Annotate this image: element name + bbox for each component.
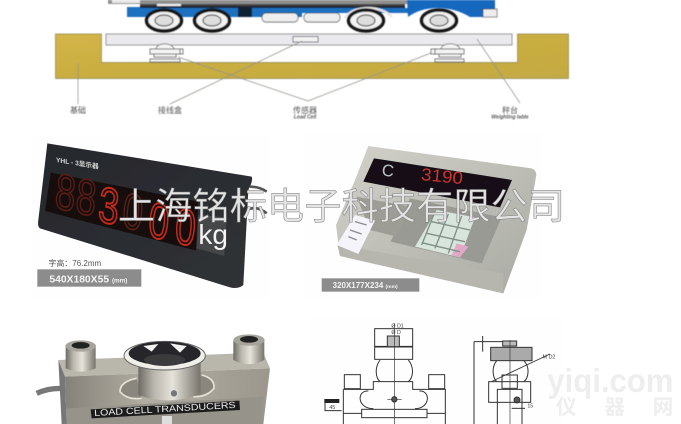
- label: load cell: Load Cell: [294, 114, 317, 120]
- LED digits: 8: [53, 163, 78, 223]
- dimension tag: [37, 269, 141, 287]
- photo background: [303, 133, 542, 302]
- leader lines: [78, 39, 520, 104]
- label: weighting table: [491, 105, 529, 120]
- front body: [65, 368, 270, 424]
- printer slot: [357, 197, 410, 237]
- photo background: [32, 135, 270, 302]
- bottom connector: [162, 416, 172, 424]
- display window: [363, 158, 512, 207]
- load cell photo: [37, 334, 270, 424]
- technical drawing: [310, 317, 673, 424]
- weighing table: [106, 34, 512, 45]
- dimension labels: 45: [329, 405, 335, 411]
- dish: [124, 341, 205, 370]
- dimension labels: M D2: [543, 354, 555, 360]
- label: weighting table: Weighting table: [491, 114, 529, 120]
- dimension tag: 540X180X55 (mm): [49, 274, 127, 285]
- truck scale diagram: [56, 0, 568, 120]
- reading: 3190: [420, 164, 464, 188]
- LED digits: [53, 163, 198, 258]
- watermark: yiqi.com: 仪器网: [556, 396, 673, 419]
- LED window: [45, 173, 198, 251]
- dimension labels: 15: [527, 403, 533, 409]
- LED digits: 3: [96, 176, 121, 237]
- side view: [474, 336, 550, 424]
- right load cell: [431, 44, 464, 62]
- cable: [37, 388, 65, 393]
- label: load cell: 传感器: [293, 105, 317, 115]
- LED digits: 0: [146, 192, 171, 252]
- dimension labels: Ø D: [391, 330, 401, 336]
- label: load cell: [293, 105, 317, 120]
- digit height note: 字高：76.2mm: [48, 258, 101, 268]
- LED digits: 8: [74, 168, 99, 228]
- truck: [108, 0, 497, 31]
- company watermark: 上海铭标电子科技有限公司: [118, 186, 565, 227]
- display housing: [38, 143, 252, 288]
- drawing background: [310, 317, 562, 424]
- dimension labels: [329, 323, 555, 411]
- watermark: yiqi.com: [547, 363, 673, 419]
- weighing indicator photo: [303, 133, 542, 302]
- large LED display photo: [32, 135, 270, 302]
- lower front bevel: [337, 245, 503, 293]
- left load cell: [150, 44, 183, 62]
- left post: [65, 340, 96, 372]
- cylinder: [138, 360, 201, 400]
- model label: YHL - 3显示器: [56, 156, 99, 171]
- wheels: [146, 10, 456, 31]
- side slots: [120, 378, 142, 399]
- front view: [325, 323, 445, 424]
- keypad: [415, 210, 475, 257]
- cable end: [324, 399, 339, 403]
- dimension labels: Ø D1: [391, 323, 404, 329]
- label: foundation: 基础: [70, 105, 86, 115]
- watermark: yiqi.com: yiqi.com: [547, 363, 673, 400]
- indicator housing: [336, 146, 536, 293]
- printer paper: [337, 215, 375, 254]
- label: junction box: 接线盒: [158, 105, 182, 115]
- nameplate: LOAD CELL TRANSDUCERS: [94, 400, 236, 418]
- LED digits: 0: [173, 198, 198, 258]
- LED digits: 0: [120, 182, 145, 243]
- dim segment C: C: [381, 161, 395, 181]
- cables: [247, 187, 267, 213]
- right post: [233, 334, 265, 364]
- label: weighting table: 秤台: [502, 105, 518, 115]
- dimension tag: [322, 278, 419, 292]
- top face: [58, 353, 270, 377]
- control panel: [391, 198, 502, 263]
- kg unit: kg: [198, 219, 228, 250]
- junction box: [293, 36, 318, 42]
- dimension tag: 320X177X234 (mm): [333, 281, 398, 290]
- foundation pit: [56, 34, 568, 78]
